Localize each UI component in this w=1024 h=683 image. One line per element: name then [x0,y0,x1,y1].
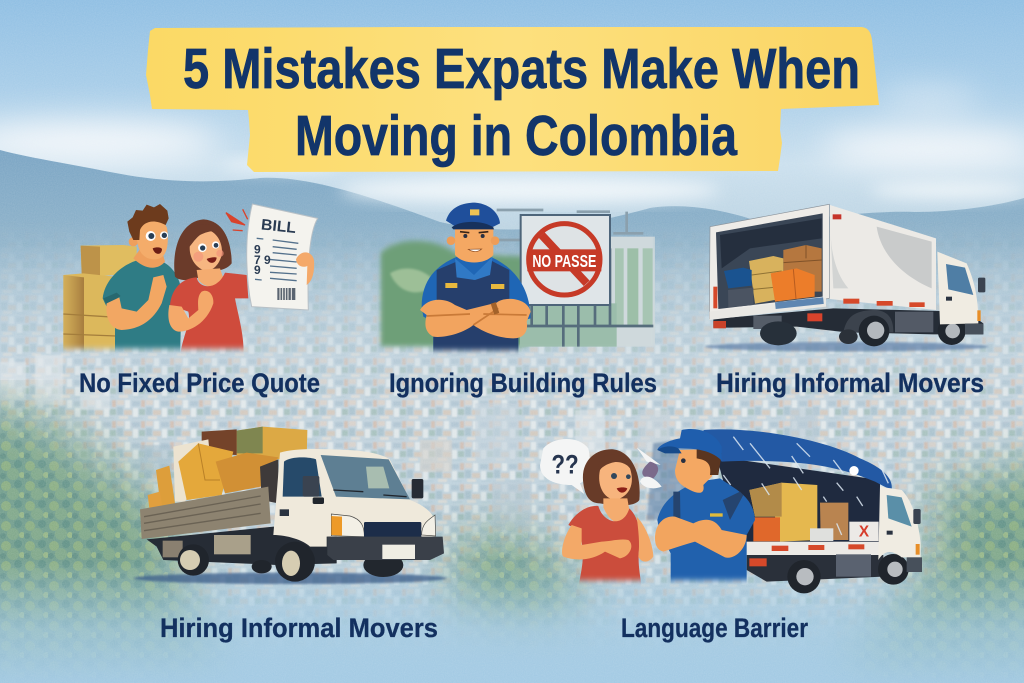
high clouds [0,92,1024,166]
title banner [146,27,879,172]
back truck cargo [647,437,880,543]
label: no fixed price quote: No Fixed Price Quote [79,368,320,398]
people and boxes, fading at bottom [63,204,248,358]
wheels [760,310,966,346]
cargo box [829,205,936,310]
banner shape [146,27,879,172]
city texture [0,247,1024,622]
label: ignoring building rules: Ignoring Building Rules [389,368,657,398]
truck shadow [133,573,447,584]
woman [562,449,653,588]
tarp [703,429,892,489]
heading text [183,37,860,168]
back truck cargo: X [859,524,870,541]
small cloud icon [637,447,662,488]
wheels [178,542,315,582]
plate [382,545,415,559]
man [655,429,755,588]
soft-edged scene contents [380,203,655,360]
heading text: 5 Mistakes Expats Make When [183,37,860,101]
cab [878,487,922,572]
heading text: Moving in Colombia [295,104,738,168]
people, fading at bottom [562,429,755,588]
load of boxes [148,427,307,508]
speech bubble: ?? [551,449,579,479]
bill: 9 [254,263,261,277]
scene 1: couple surprised by bill [63,204,318,358]
cab [273,449,436,547]
truck bed [140,487,271,539]
scene 4: overloaded informal pickup truck [133,427,447,584]
open rear frame [709,204,829,320]
man [103,204,182,358]
label: hiring informal movers bottom: Hiring Informal Movers [160,613,438,643]
label: language barrier: Language Barrier [621,613,808,643]
bill: BILL [260,216,297,237]
cab [937,252,985,334]
rain streaks [723,437,888,535]
no passe sign [521,215,610,305]
scene 2: guard in front of no-entry sign [380,203,655,360]
chassis [147,527,337,565]
mid clouds [220,159,1024,203]
bill [226,204,318,310]
mountains [0,150,1024,360]
woman [168,219,248,358]
trees and building [380,210,655,347]
bill: 7 9 [254,253,271,267]
front bumper [327,537,444,560]
label: hiring informal movers top: Hiring Informal Movers [716,368,984,398]
truck shadow [705,342,988,351]
boxes [63,245,137,357]
forest [0,380,1024,683]
chassis [713,308,983,334]
truck bed and chassis [746,542,883,582]
cargo boxes [724,245,822,307]
far wheel [363,553,403,577]
scene 5: language barrier with rain-covered truck [540,429,922,593]
bill: 9 [254,242,261,256]
bottom mist [0,560,1024,683]
scene 3: moving truck with open back [705,204,988,351]
speech bubble [540,439,590,494]
wheels [787,554,909,593]
no passe sign: NO PASSE [532,251,596,271]
guard [420,203,531,360]
city towers [0,355,1024,550]
